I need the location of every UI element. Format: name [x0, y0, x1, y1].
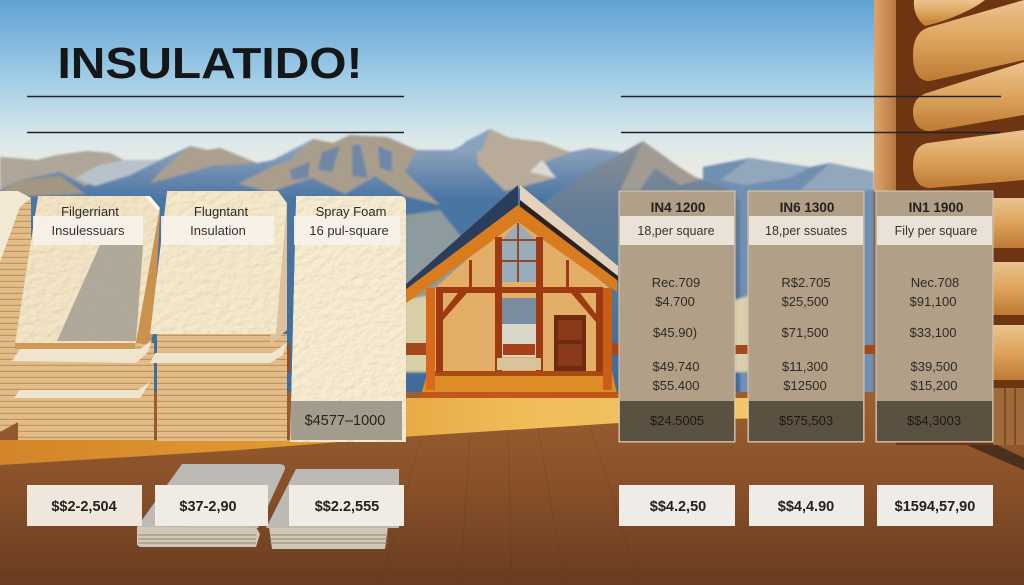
panel: price table 2: $575,503: [779, 413, 833, 428]
house wall: [430, 215, 610, 372]
panel: price table 1: IN4 1200: [651, 200, 705, 215]
log cabin wall: [874, 0, 1024, 445]
title: INSULATIDO!: [58, 39, 362, 88]
upper window: [502, 223, 536, 282]
panel: price table 1: Rec.709: [652, 275, 700, 290]
price label 1: $$2-2,504: [51, 499, 117, 515]
panel: price table 2: $12500: [783, 378, 827, 393]
price label 5: [749, 485, 864, 526]
panel: price table 2: $71,500: [782, 325, 828, 340]
panel 1 label: Filgerriant: [61, 204, 119, 219]
panel 3 label: Spray Foam: [316, 204, 386, 219]
panel: price table 3: $39,500: [910, 359, 958, 374]
panel: price table 1: [619, 191, 735, 442]
roof: [405, 185, 518, 290]
wooden floor: [0, 392, 1024, 585]
panel: price table 3: $91,100: [910, 294, 956, 309]
panel: price table 1: $49.740: [652, 359, 700, 374]
price band: [291, 401, 402, 440]
panel 1 label: Insulessuars: [52, 223, 125, 238]
panel: price table 3: [876, 191, 993, 442]
price label 3: [289, 485, 404, 526]
foam board: [150, 191, 287, 334]
panel: price table 2: IN6 1300: [780, 200, 834, 215]
sky background: [0, 0, 1024, 190]
price label 6: $1594,57,90: [895, 499, 975, 515]
panel: price table 1: $4.700: [655, 294, 695, 309]
panel 2 label: [161, 204, 274, 245]
panel 1 label: [33, 204, 143, 245]
price label 3: $$2.2,555: [315, 499, 379, 515]
panel: price table 3: Fily per square: [895, 224, 977, 238]
price label 5: $$4,4.90: [778, 499, 834, 515]
panel: price table 1: $45.90): [653, 325, 697, 340]
foam board: [15, 196, 160, 343]
panel 3 label: [294, 204, 400, 245]
panel 2 label: Flugntant: [194, 204, 248, 219]
shadow: [57, 245, 143, 341]
panel: price table 3: IN1 1900: [909, 200, 963, 215]
porch posts: [426, 288, 435, 390]
panel 3 label: 16 pul-square: [309, 223, 389, 238]
price label 4: $$4.2,50: [650, 499, 706, 515]
panel: price table 2: [748, 191, 864, 442]
lower window: [497, 298, 541, 370]
insulation stack 1 (partial): [0, 191, 31, 432]
insulation stack 3: [150, 191, 287, 441]
panel: price table 3: $$4,3003: [907, 413, 961, 428]
left title rules: [27, 96, 404, 132]
right title rules: [621, 96, 1001, 132]
panel: price table 3: $33,100: [910, 325, 956, 340]
panel: price table 2: $25,500: [782, 294, 828, 309]
mountain range: [0, 129, 874, 400]
timber frame: [436, 237, 603, 372]
panel: price table 1: $55.400: [652, 378, 700, 393]
panel: price table 2: 18,per ssuates: [765, 224, 847, 238]
railing: [283, 343, 876, 372]
small board samples: [137, 464, 399, 549]
panel: price table 2: $11,300: [782, 359, 828, 374]
panel: price table 1: $24.5005: [650, 413, 704, 428]
porch floor: [420, 371, 618, 398]
spray foam board: [290, 196, 406, 442]
spray foam board: $4577–1000: [305, 413, 385, 429]
price label 4: [619, 485, 735, 526]
panel 2 label: Insulation: [190, 223, 246, 238]
price label 2: [155, 485, 268, 526]
price label 6: [877, 485, 993, 526]
insulation stack 2: [12, 196, 160, 440]
panel: price table 1: 18,per square: [637, 224, 715, 238]
price label 2: $37-2,90: [179, 499, 237, 515]
price label 1: [27, 485, 142, 526]
panel: price table 2: R$2.705: [781, 275, 831, 290]
panel: price table 3: $15,200: [910, 378, 958, 393]
door: [554, 315, 586, 371]
panel: price table 3: Nec.708: [911, 275, 959, 290]
gable trim: [405, 205, 617, 304]
house: [283, 185, 876, 398]
